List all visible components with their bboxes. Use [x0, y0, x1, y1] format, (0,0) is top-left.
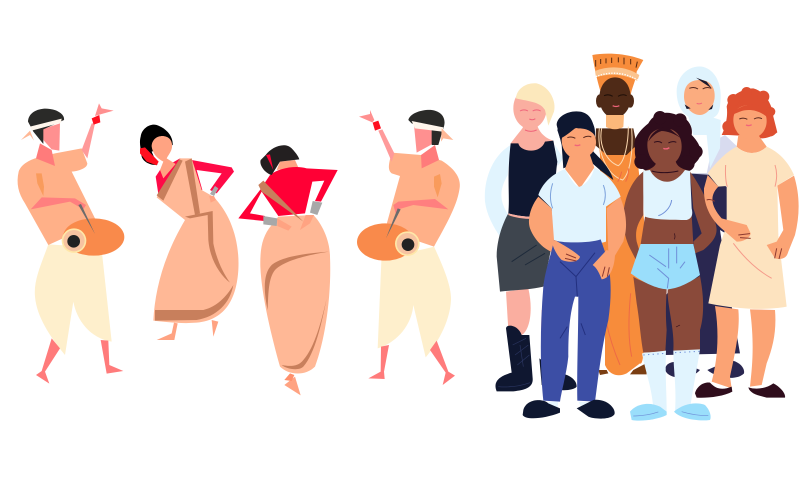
figure: woman in saree facing away [238, 145, 338, 395]
figure: left drummer [18, 103, 124, 384]
group of six women [485, 54, 799, 421]
woman with dark straight hair and blue jeans [523, 111, 626, 419]
figure: right drummer [357, 110, 460, 385]
figure: woman in saree facing left [140, 125, 239, 340]
woman with orange headdress [592, 54, 647, 375]
woman with red hair and cream dress [695, 87, 799, 398]
woman with dark curly hair and white top [623, 111, 717, 421]
blonde woman in navy top [485, 83, 577, 391]
woman in white hijab [665, 66, 744, 378]
